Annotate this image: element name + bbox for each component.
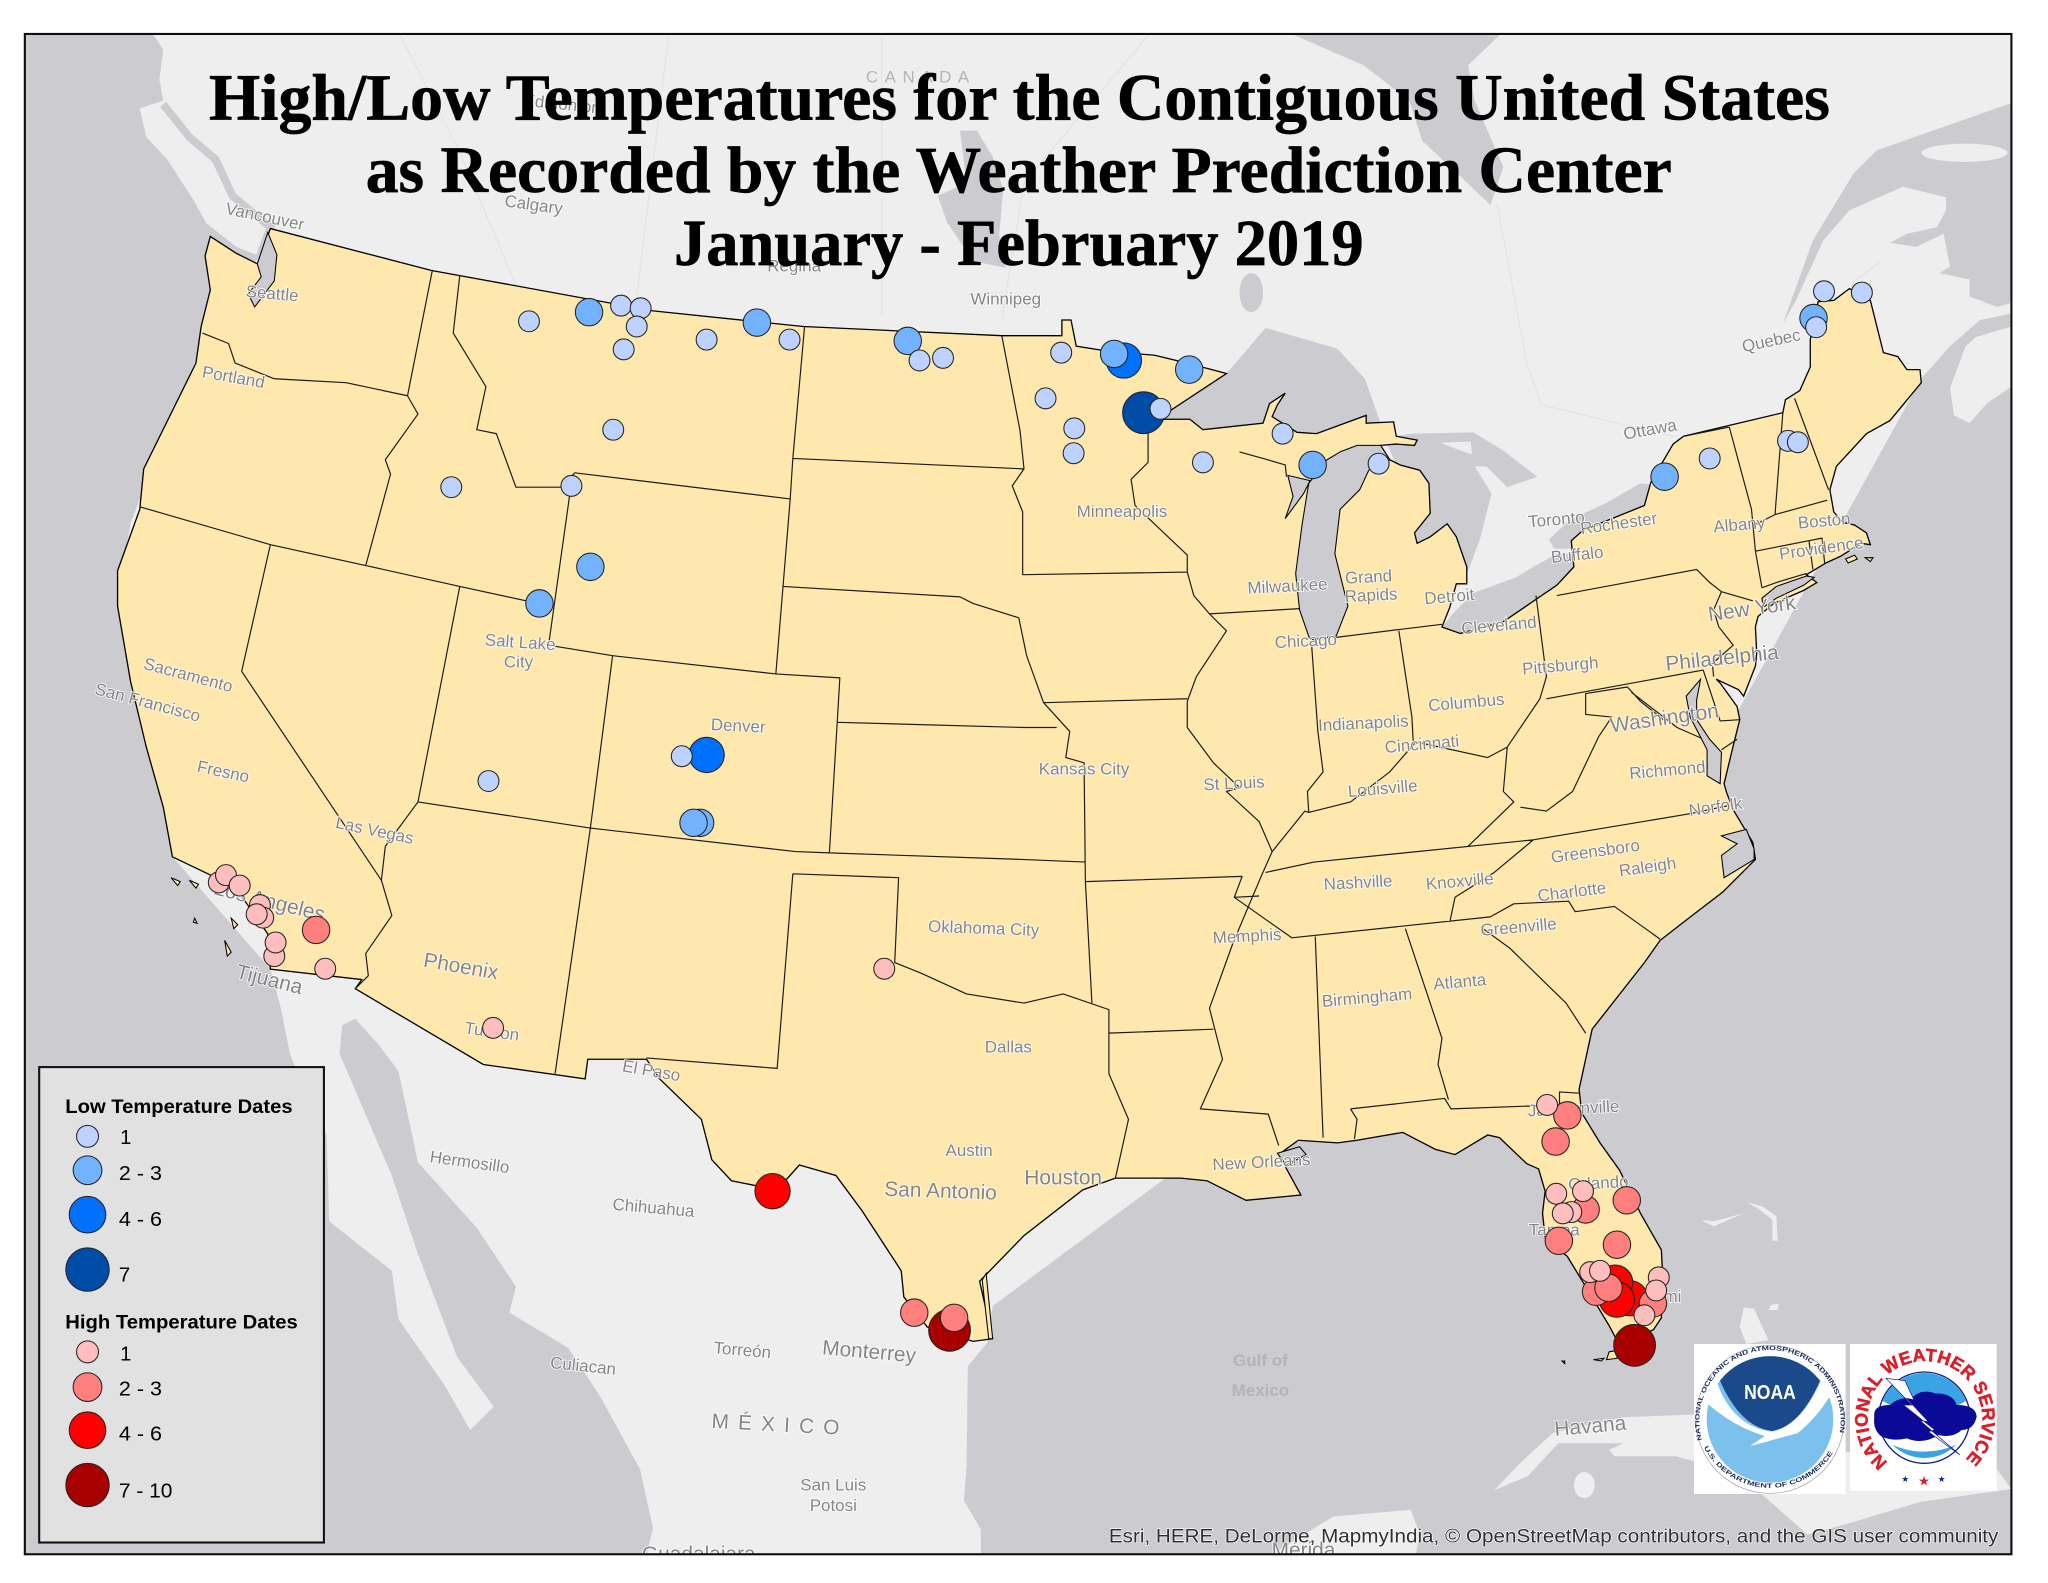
city and place labels: Fresno <box>195 757 251 787</box>
city and place labels: Boston <box>1797 509 1851 533</box>
city and place labels: Grand <box>1344 566 1393 588</box>
Strait of Georgia <box>163 104 270 256</box>
Lake Winnipeg <box>938 131 1006 268</box>
small lake <box>1240 273 1263 312</box>
city and place labels: Tampa <box>1529 1221 1580 1240</box>
city and place labels: Gulf of <box>1233 1351 1288 1370</box>
city and place labels: Vancouver <box>224 199 306 234</box>
city and place labels: Memphis <box>1212 925 1282 947</box>
city and place labels: San Antonio <box>884 1178 997 1205</box>
city and place labels: MÉXICO <box>711 1410 849 1440</box>
city and place labels: Orlando <box>1568 1172 1629 1194</box>
city and place labels: Norfolk <box>1688 794 1744 820</box>
low temperature date markers <box>441 281 1872 837</box>
Green Bay <box>1285 475 1310 519</box>
city and place labels: Chicago <box>1274 630 1337 652</box>
city and place labels: Potosi <box>810 1496 857 1515</box>
high temperature date markers <box>208 865 1669 1366</box>
city and place labels: Buffalo <box>1550 543 1604 567</box>
Gulf of Mexico and Atlantic <box>964 313 2011 1554</box>
city and place labels: City <box>504 652 534 671</box>
city and place labels: Calgary <box>503 191 564 218</box>
James Bay <box>1292 34 1503 205</box>
Manitoulin Island <box>1441 441 1472 455</box>
city and place labels: Austin <box>946 1141 993 1160</box>
Lake Pontchartrain area <box>1277 1147 1306 1165</box>
Isle of Youth <box>1574 1472 1595 1498</box>
NOAA logo <box>1694 1344 1846 1494</box>
city and place labels: Greenville <box>1480 914 1557 940</box>
Nova Scotia <box>1950 327 2011 423</box>
Channel Islands <box>171 878 238 956</box>
city and place labels: Monterrey <box>821 1336 918 1367</box>
city and place labels: Milwaukee <box>1247 575 1328 598</box>
Lake Huron <box>1388 432 1537 572</box>
Canadian provincial borders <box>400 34 1881 438</box>
National Weather Service logo: ★ <box>1938 1475 1946 1485</box>
Cuba <box>1494 1415 2011 1535</box>
city and place labels: Culiacan <box>549 1353 617 1379</box>
city and place labels: Dallas <box>985 1038 1032 1057</box>
attribution text: Esri, HERE, DeLorme, MapmyIndia, © OpenStreetMap contributors, and the GIS user community <box>1109 1526 1999 1548</box>
city and place labels: Oklahoma City <box>928 917 1040 940</box>
city and place labels: Edmonton <box>523 91 602 118</box>
city and place labels: Miami <box>1636 1287 1681 1306</box>
National Weather Service logo: ★ <box>1918 1475 1930 1490</box>
city and place labels: Salt Lake <box>484 630 556 654</box>
city and place labels: Guadalajara <box>642 1543 756 1566</box>
city and place labels: Charlotte <box>1537 878 1607 905</box>
Lake Erie <box>1442 554 1575 640</box>
land islands over water <box>1272 144 2011 1554</box>
city and place labels: New York <box>1707 591 1798 626</box>
low temperature legend <box>65 1097 293 1291</box>
title <box>209 63 1830 280</box>
city and place labels: San Luis <box>800 1475 866 1494</box>
city and place labels: Ottawa <box>1622 415 1679 444</box>
NOAA logo: NATIONAL OCEANIC AND ATMOSPHERIC ADMINISTRATION <box>1694 1346 1846 1440</box>
city and place labels: Albany <box>1713 513 1766 537</box>
high temperature legend: 4 - 6 <box>119 1424 162 1446</box>
NOAA logo: U.S. DEPARTMENT OF COMMERCE <box>1704 1446 1833 1488</box>
city and place labels: Mérida <box>1272 1539 1336 1562</box>
low temperature legend: 2 - 3 <box>119 1163 162 1185</box>
city and place labels: Sacramento <box>142 654 235 696</box>
city and place labels: Hermosillo <box>429 1147 511 1177</box>
city and place labels: Quebec <box>1740 325 1803 356</box>
city and place labels: Denver <box>710 715 766 737</box>
city and place labels: Regina <box>767 257 822 276</box>
low temperature legend: 7 <box>119 1264 130 1286</box>
city and place labels: Richmond <box>1629 758 1706 783</box>
city and place labels: Jacksonville <box>1527 1097 1620 1120</box>
city and place labels: Torreón <box>713 1338 772 1362</box>
city and place labels: Greensboro <box>1550 836 1641 867</box>
logos <box>1694 1344 1997 1494</box>
city and place labels: Columbus <box>1427 690 1505 715</box>
city and place labels: CANADA <box>866 67 976 86</box>
Long Island Sound <box>1762 576 1814 607</box>
city and place labels: Portland <box>201 362 266 392</box>
National Weather Service logo: NATIONAL WEATHER SERVICE <box>1854 1348 1996 1471</box>
city and place labels: Raleigh <box>1618 854 1677 880</box>
city and place labels: Indianapolis <box>1318 711 1409 735</box>
city and place labels: Phoenix <box>422 949 501 985</box>
NOAA logo: NOAA <box>1744 1381 1796 1404</box>
city and place labels: Detroit <box>1424 585 1475 608</box>
city and place labels: St Louis <box>1203 772 1265 794</box>
low temperature legend: 4 - 6 <box>119 1209 162 1231</box>
city and place labels: Winnipeg <box>970 289 1041 308</box>
Lake Superior <box>1166 328 1380 433</box>
great lakes and coastal waters over the land <box>248 232 1814 1165</box>
city and place labels: El Paso <box>621 1056 682 1085</box>
city and place labels: New Orleans <box>1212 1150 1311 1174</box>
city and place labels: San Francisco <box>93 679 203 726</box>
title: January - February 2019 <box>674 208 1364 280</box>
Bahamas <box>1701 1202 1779 1344</box>
Florida Keys <box>1562 1351 1617 1364</box>
city and place labels: Pittsburgh <box>1521 653 1599 679</box>
city and place labels: Nashville <box>1323 871 1393 894</box>
Lake Michigan <box>1296 445 1390 640</box>
city and place labels: Minneapolis <box>1077 502 1167 521</box>
title: High/Low Temperatures for the Contiguous United States <box>209 63 1830 135</box>
city and place labels: Mexico <box>1232 1381 1289 1400</box>
city and place labels: Atlanta <box>1433 970 1487 994</box>
Nantucket and Marthas Vineyard <box>1846 555 1873 563</box>
high temperature legend: 2 - 3 <box>119 1379 162 1401</box>
city and place labels: Tucson <box>463 1018 520 1045</box>
Anticosti Island <box>1921 144 2007 162</box>
city and place labels: Louisville <box>1347 776 1418 801</box>
high temperature legend <box>65 1312 298 1507</box>
city and place labels: Chihuahua <box>612 1195 696 1221</box>
city and place labels: Kansas City <box>1039 760 1130 779</box>
city and place labels: Tijuana <box>234 960 305 999</box>
legend panel <box>39 1067 324 1543</box>
city and place labels: Providence <box>1778 533 1865 564</box>
city and place labels: Seattle <box>245 282 299 305</box>
city and place labels: Houston <box>1024 1167 1102 1190</box>
title: as Recorded by the Weather Prediction Center <box>366 135 1672 207</box>
city and place labels: Los Angeles <box>211 877 327 926</box>
city and place labels: Cincinnati <box>1384 732 1460 757</box>
low temperature legend: Low Temperature Dates <box>65 1097 293 1118</box>
city and place labels: Rochester <box>1579 509 1659 538</box>
Chesapeake Bay <box>1686 679 1721 784</box>
high temperature legend: 1 <box>120 1343 131 1365</box>
state boundaries <box>140 270 1829 1178</box>
Pacific Ocean <box>25 34 653 1554</box>
Padre Island <box>982 1273 993 1339</box>
city and place labels: Philadelphia <box>1664 641 1780 676</box>
contiguous United States landmass <box>118 229 1921 1345</box>
city and place labels: Washington <box>1609 699 1720 737</box>
Pamlico Sound <box>1721 829 1754 878</box>
city and place labels: Cleveland <box>1461 613 1537 638</box>
city and place labels: Toronto <box>1527 508 1585 532</box>
Lake Ontario <box>1549 483 1650 549</box>
National Weather Service logo: ★ <box>1901 1475 1909 1485</box>
Gulf of St Lawrence <box>1783 103 2011 324</box>
high temperature legend: 7 - 10 <box>119 1480 172 1502</box>
city and place labels: Birmingham <box>1321 984 1413 1011</box>
Yucatan <box>1272 1510 1420 1554</box>
city and place labels: Havana <box>1553 1412 1628 1441</box>
high temperature legend: High Temperature Dates <box>65 1312 298 1333</box>
low temperature legend: 1 <box>120 1127 131 1149</box>
offshore islands <box>171 555 1873 1364</box>
city and place labels: Las Vegas <box>334 813 415 848</box>
city and place labels: Rapids <box>1344 584 1398 606</box>
city and place labels: Knoxville <box>1425 869 1494 894</box>
Puget Sound <box>248 232 277 307</box>
